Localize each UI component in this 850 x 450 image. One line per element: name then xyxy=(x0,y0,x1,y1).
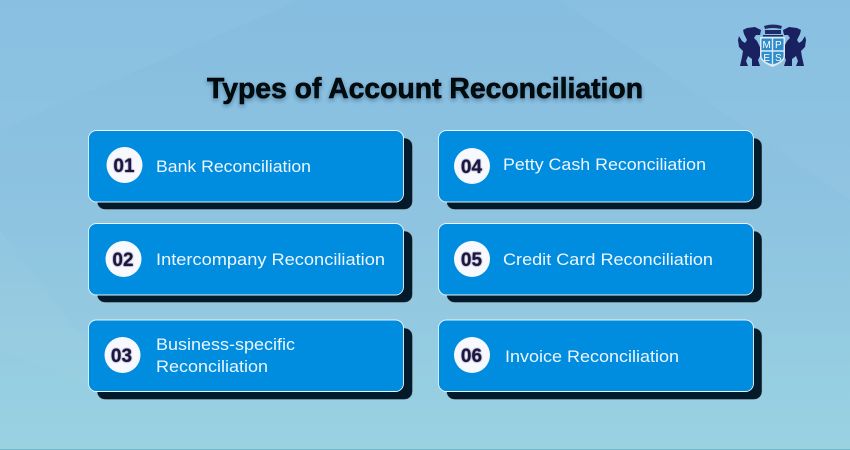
number badge: 03 xyxy=(111,346,132,367)
panel: 01 Bank Reconciliation xyxy=(88,130,412,210)
number badge: 04 xyxy=(461,157,482,178)
number badge: 05 xyxy=(461,250,482,271)
icon: shield: M xyxy=(763,40,771,51)
panel: 04 Petty Cash Reconciliation xyxy=(438,130,762,210)
logo: MPES crest with lions xyxy=(738,24,806,67)
icon: left lion xyxy=(738,27,761,66)
title: Types of Account Reconciliation xyxy=(207,73,643,105)
number badge xyxy=(104,337,140,373)
number badge xyxy=(106,147,142,183)
label: Invoice Reconciliation xyxy=(505,347,679,366)
label: Petty Cash Reconciliation xyxy=(503,155,706,174)
icon: shield: P xyxy=(775,40,782,51)
label: Intercompany Reconciliation xyxy=(156,250,385,269)
number badge xyxy=(454,241,490,277)
panel: 05 Credit Card Reconciliation xyxy=(438,224,762,302)
label xyxy=(156,335,296,376)
panel: 02 Intercompany Reconciliation xyxy=(88,224,412,302)
number badge xyxy=(454,148,490,184)
number badge xyxy=(106,241,142,277)
label: Reconciliation xyxy=(156,357,268,376)
icon: right lion xyxy=(783,27,806,66)
icon: shield: E xyxy=(763,53,770,64)
panel: 03 Business-specific Reconciliation xyxy=(88,320,412,400)
icon: shield xyxy=(760,37,785,67)
icon: crown xyxy=(763,24,783,36)
label: Business-specific xyxy=(156,335,296,354)
panel: 06 Invoice Reconciliation xyxy=(438,320,762,400)
number badge: 02 xyxy=(112,250,134,271)
number badge xyxy=(454,337,490,373)
number badge: 01 xyxy=(113,156,135,177)
label: Credit Card Reconciliation xyxy=(503,250,713,269)
icon: shield: S xyxy=(775,53,782,64)
label: Bank Reconciliation xyxy=(156,157,311,176)
number badge: 06 xyxy=(461,346,482,367)
